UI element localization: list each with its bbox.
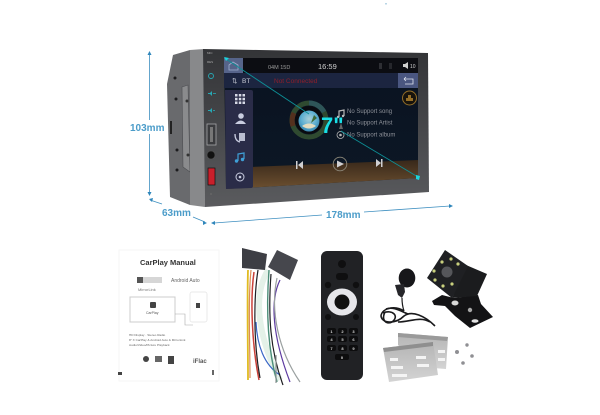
playback controls: [296, 157, 382, 171]
remote keypad: 2: [341, 329, 344, 334]
diagonal measure: 7 inch: [224, 57, 420, 180]
top speck: [385, 3, 387, 4]
device front trim: [190, 49, 205, 207]
remote keypad: 7: [330, 346, 333, 351]
sd slot: [208, 168, 215, 185]
accessory: CarPlay manual: Audio/Video/Picture Playback: [129, 343, 170, 347]
remote d-pad: [327, 288, 357, 316]
dimension: 178mm width: 178mm: [326, 210, 361, 221]
accessory: rear camera: [427, 250, 493, 328]
usb port: [207, 124, 216, 145]
accessory: CarPlay manual: HD Display · Stereo Radio: [129, 333, 166, 337]
screen: 16:59: [318, 62, 337, 71]
connector left: [242, 248, 267, 270]
accessory: CarPlay manual: iFlac: [193, 359, 207, 365]
track info: No Support album: [347, 132, 395, 138]
camera face: [427, 250, 468, 298]
connector right: [268, 250, 298, 280]
screen: 10: [410, 64, 416, 70]
dimension: 63mm depth: [149, 198, 207, 225]
dimension: 103mm height: 103mm: [130, 123, 165, 134]
remote top buttons: [338, 260, 346, 268]
device side panel: [167, 50, 190, 205]
track info: [337, 109, 395, 138]
sidebar icons: [235, 94, 246, 181]
track info: No Support Artist: [347, 120, 393, 126]
accessory: CarPlay manual: 8" X CarPlay & Android Auto & MirrorLink: [129, 338, 186, 342]
remote keypad: [327, 328, 358, 360]
remote keypad: 6: [352, 337, 355, 342]
remote keypad: 1: [330, 329, 333, 334]
accessory: CarPlay manual: Android Auto: [171, 278, 200, 284]
accessory: microphone: [381, 268, 435, 326]
equalizer badge: [402, 91, 416, 105]
front panel buttons: MIC: [207, 51, 213, 55]
album disc: [292, 103, 326, 137]
accessory: screws: [455, 343, 474, 365]
accessory: remote control: [321, 251, 363, 380]
music sidebar: [225, 90, 253, 189]
device: head unit: [167, 49, 429, 207]
remote keypad: 3: [352, 329, 355, 334]
accessory: wiring harness: [242, 248, 300, 385]
top status bar: [224, 58, 418, 73]
dimension: 103mm height: [130, 51, 165, 196]
screen: ⇅: [232, 78, 238, 85]
wood floor: [226, 160, 418, 189]
remote keypad: 8: [341, 346, 344, 351]
accessory: CarPlay manual: [118, 250, 219, 381]
camera side: [452, 265, 487, 298]
dimension: 63mm depth: 63mm: [162, 208, 191, 219]
front panel buttons: [207, 51, 216, 195]
screen: 04M 15D: [268, 65, 290, 71]
accessory: CarPlay manual: CarPlay: [146, 311, 159, 315]
device front bezel: [203, 49, 429, 207]
diagonal measure: 7 inch: 7": [321, 113, 344, 138]
track info: No Support song: [347, 109, 392, 115]
screen: Not Connected: [274, 78, 318, 85]
remote keypad: 9: [352, 346, 355, 351]
bluetooth bar: [224, 73, 418, 88]
dimension: 178mm width: [211, 204, 453, 225]
screen: [224, 58, 418, 189]
front panel buttons: RES: [207, 60, 213, 64]
accessory: CarPlay manual: MirrorLink: [138, 287, 156, 292]
screen: BT: [242, 78, 250, 85]
remote keypad: 5: [341, 337, 344, 342]
aux jack: [207, 151, 215, 159]
camera bracket: [432, 295, 493, 328]
accessory: CarPlay manual: CarPlay Manual: [140, 258, 196, 267]
remote keypad: 0: [341, 355, 344, 360]
accessory: mounting brackets: [383, 333, 448, 382]
remote keypad: 4: [330, 337, 333, 342]
